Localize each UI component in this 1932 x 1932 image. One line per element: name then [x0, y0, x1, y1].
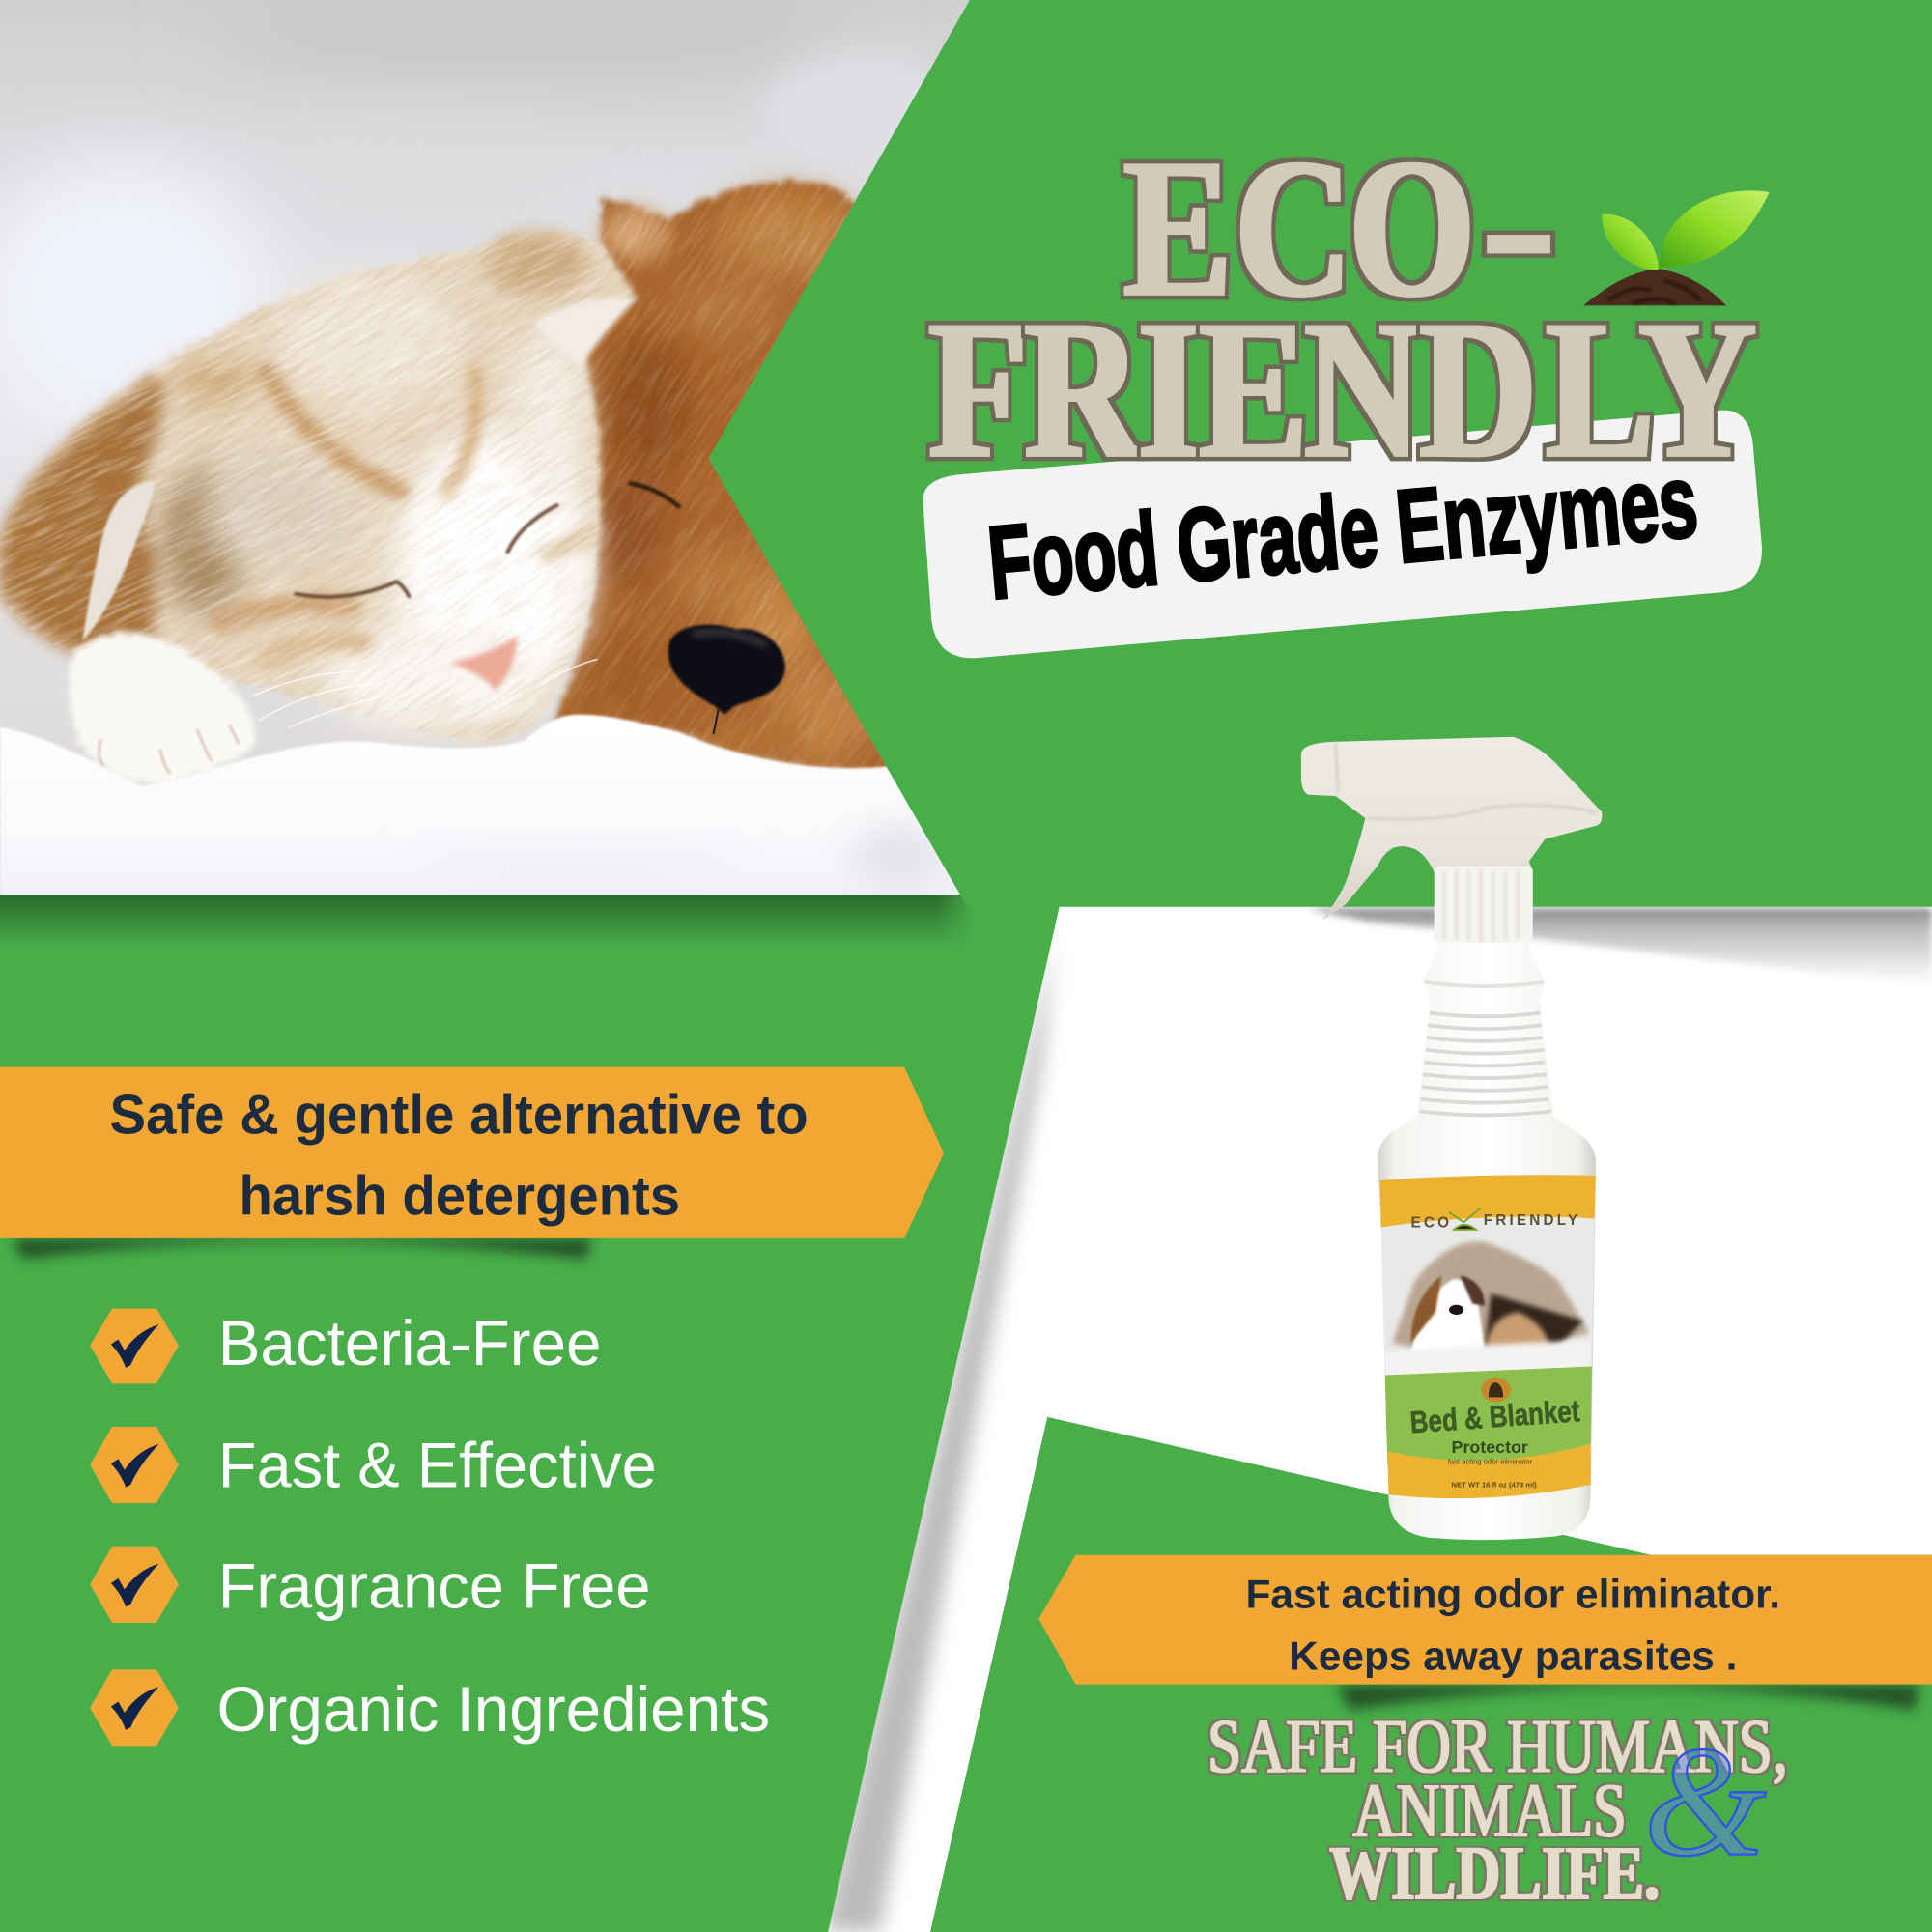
panel: lower-left green — [0, 895, 1060, 1932]
item: organic ingredients: Organic Ingredients — [216, 1674, 770, 1746]
title: eco-friendly — [928, 114, 1756, 499]
left leaf — [1602, 214, 1659, 270]
puppy — [550, 168, 891, 775]
label net weight: NET WT 16 fl oz (473 ml) — [1452, 1481, 1537, 1490]
panel: bottom-right green — [930, 1417, 1932, 1932]
banner text line 1: Fast acting odor eliminator. — [1246, 1572, 1780, 1617]
title line: friendly: L — [1546, 279, 1655, 499]
label name: Bed & Blanket — [1408, 1393, 1581, 1439]
kitten right ear — [532, 297, 639, 367]
title line: friendly: N — [1304, 279, 1422, 499]
label protector: Protector — [1452, 1437, 1528, 1457]
tagline line 2: ANIMALS — [1353, 1770, 1627, 1854]
puppy closed eye — [629, 483, 680, 508]
label top band — [1380, 1175, 1596, 1227]
title line: eco: C — [1235, 118, 1352, 338]
shadow on white below top green — [1306, 908, 1932, 985]
label eco friendly right: FRIENDLY — [1484, 1212, 1580, 1229]
banner text line 2: harsh detergents — [239, 1166, 680, 1228]
label eco friendly: ECO — [1410, 1214, 1452, 1231]
photo: sleeping kitten and puppy — [0, 0, 970, 895]
title line: eco — [1123, 118, 1475, 338]
blue ampersand: & — [1644, 1716, 1767, 1889]
label picture: dog and cat under blanket — [1380, 1241, 1596, 1386]
label image band — [1381, 1217, 1595, 1375]
kitten fur texture — [0, 230, 636, 741]
tagline line 3: WILDLIFE. — [1329, 1833, 1660, 1917]
title line: eco: E — [1123, 118, 1232, 338]
banner shadow — [1337, 1685, 1919, 1710]
feature list — [90, 1308, 770, 1746]
kitten tan markings — [222, 370, 594, 659]
bottle neck ridges — [1419, 982, 1551, 1115]
tagline: safe for humans, animals and wildlife — [1208, 1705, 1788, 1917]
label tagline: fast acting odor eliminator — [1448, 1457, 1533, 1465]
title line: friendly: F — [928, 279, 1028, 499]
trigger head — [1301, 737, 1602, 921]
kitten nose — [450, 636, 518, 690]
label sprout mark — [1449, 1208, 1481, 1230]
banner text line 1: Safe & gentle alternative to — [110, 1084, 809, 1146]
left orange banner — [0, 1067, 944, 1260]
right leaf — [1660, 190, 1770, 268]
item: fast and effective: Fast & Effective — [218, 1431, 657, 1502]
spray bottle — [1301, 737, 1602, 1540]
shadow under photo — [0, 895, 976, 952]
banner shadow — [13, 1238, 591, 1260]
item: fragrance free: Fragrance Free — [218, 1551, 650, 1623]
tilted white pill — [923, 411, 1762, 658]
bottle body — [1378, 943, 1596, 1540]
item: bacteria-free: Bacteria-Free — [218, 1308, 601, 1379]
kitten left ear flap — [82, 480, 156, 640]
label middle band — [1385, 1367, 1592, 1465]
panel: top-right green — [708, 0, 1932, 907]
puppy fur texture — [556, 182, 886, 767]
right orange banner — [1038, 1555, 1932, 1710]
kitten whiskers — [252, 659, 598, 727]
title line: friendly: D — [1420, 279, 1537, 499]
banner text line 2: Keeps away parasites . — [1289, 1633, 1737, 1678]
puppy nose — [668, 625, 785, 734]
kitten closed eyes — [296, 505, 557, 597]
label bottom band — [1387, 1444, 1591, 1498]
shadow along green diagonal — [823, 936, 1055, 1932]
soil — [1583, 269, 1726, 305]
title line: eco: O — [1349, 118, 1475, 338]
tagline line 1: SAFE FOR HUMANS, — [1208, 1705, 1788, 1789]
banner shape — [1038, 1555, 1932, 1685]
pump collar — [1435, 867, 1533, 943]
label small animal icon — [1481, 1378, 1511, 1403]
title line: friendly: Y — [1638, 279, 1756, 499]
title line: friendly: I — [1138, 279, 1201, 499]
title hyphen: - — [1482, 114, 1555, 334]
title line: friendly: R — [1025, 279, 1144, 499]
banner shape — [0, 1067, 944, 1238]
title line: friendly — [928, 279, 1756, 499]
kitten paw — [70, 633, 256, 786]
title line: friendly: E — [1200, 279, 1308, 499]
bottle label — [1380, 1175, 1596, 1498]
photo backdrop — [0, 0, 985, 895]
icon: sprout — [1583, 190, 1770, 305]
kitten — [0, 220, 640, 744]
bedding — [0, 713, 960, 895]
